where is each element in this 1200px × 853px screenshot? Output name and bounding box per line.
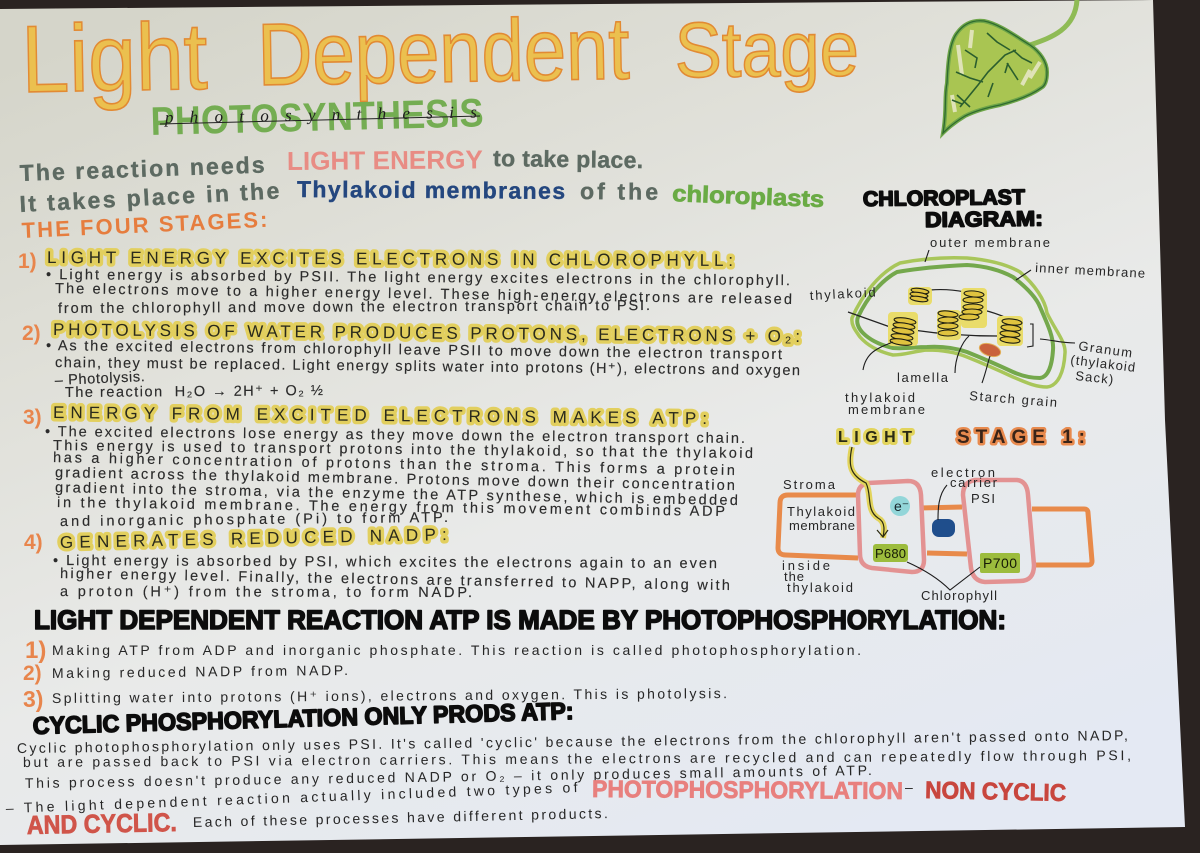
closing statement: – The light dependent reaction actually included two types of <box>6 779 578 816</box>
stage 4 body text: higher energy level. Finally, the electrons are transferred to NAPP, along with <box>60 566 730 594</box>
stage 2 body text: • As the excited electrons from chlorophyll leave PSII to move down the electron transport <box>46 338 782 363</box>
closing statement: PHOTOPHOSPHORYLATION <box>592 776 903 805</box>
list item 3: 3) <box>23 686 43 712</box>
stage 1 labels: membrane <box>789 518 855 533</box>
heading: chloroplast diagram: DIAGRAM: <box>925 208 1043 232</box>
stage 3 <box>23 403 753 530</box>
icon: leaf <box>943 0 1077 133</box>
stage 1 labels: carrier <box>950 475 998 490</box>
stage 1: 1) <box>18 250 37 273</box>
stage 1 labels: electron <box>931 465 995 480</box>
subtitle: Photosynthesis: PHOTOSYNTHESIS <box>150 91 484 144</box>
cyclic paragraph: but are passed back to PSI via electron carriers. This means the electrons are recycled and can repeatedly flow through PSI, <box>23 747 1131 770</box>
stage 3: 3) <box>23 406 42 429</box>
stage 1 labels: PSI <box>971 491 995 506</box>
cyclic paragraph: This process doesn't produce any reduced NADP or O₂ – it only produces small amounts of ATP. <box>25 762 872 791</box>
closing statement <box>6 776 1066 840</box>
stage 4 body text: a proton (H⁺) from the stroma, to form NADP. <box>60 584 472 601</box>
diagram labels: Granum <box>1078 338 1133 360</box>
intro sentence 2: Thylakoid membranes <box>297 176 565 204</box>
title: Light Dependent Stage: Dependent <box>257 0 630 104</box>
diagram labels: Starch grain <box>969 388 1058 410</box>
intro sentence 1: The reaction needs <box>19 151 265 186</box>
stage 1 labels: thylakoid <box>787 580 853 595</box>
arrow: light to P680 <box>850 447 884 538</box>
intro sentence 1: LIGHT ENERGY <box>287 144 483 176</box>
outer membrane <box>852 258 1065 387</box>
intro sentence 1 <box>19 144 643 186</box>
diagram labels: (thylakoid <box>1070 352 1136 375</box>
numbered list <box>23 637 861 712</box>
stage 4 body text: • Light energy is absorbed by PSI, which excites the electrons again to an even <box>53 553 717 572</box>
closing statement: NON CYCLIC <box>925 777 1066 807</box>
pointer lines <box>863 250 1075 383</box>
list item 1: 1) <box>25 637 46 664</box>
P700: P700 <box>983 555 1017 571</box>
lamella lines <box>848 290 1007 336</box>
starch grain <box>978 341 1002 359</box>
title: Light Dependent Stage: Stage <box>674 4 859 94</box>
stage 3: ENERGY FROM EXCITED ELECTRONS MAKES ATP: <box>53 403 707 428</box>
stage 1 body text: The electrons move to a higher energy level. These high-energy electrons are released <box>55 281 792 308</box>
title: Light Dependent Stage <box>21 0 859 113</box>
stage 2 body text <box>46 338 800 401</box>
closing statement: AND CYCLIC. <box>27 807 177 840</box>
diagram labels: outer membrane <box>930 235 1050 250</box>
stage 1 labels: inside <box>782 558 830 573</box>
stage 1 <box>18 248 792 317</box>
photosystem I <box>963 480 1034 582</box>
diagram labels: lamella <box>897 370 949 385</box>
diagram labels: thylakoid <box>845 390 915 405</box>
list item 3: Splitting water into protons (H⁺ ions), electrons and oxygen. This is photolysis. <box>52 685 727 706</box>
stage 2 body text: – Photolysis. <box>54 369 145 389</box>
list item 2: Making reduced NADP from NADP. <box>52 662 348 681</box>
intro sentence 2: chloroplasts <box>672 180 825 212</box>
list item 1 <box>25 637 861 664</box>
stage 2: PHOTOLYSIS OF WATER PRODUCES PROTONS, ELECTRONS + O₂: <box>53 320 800 346</box>
stage 2: 2) <box>22 322 41 345</box>
stage 1 diagram <box>778 427 1092 603</box>
diagram labels <box>809 235 1145 417</box>
heading: cyclic phosphorylation: CYCLIC PHOSPHORYLATION ONLY PRODS ATP: <box>32 698 574 740</box>
intro sentence 2 <box>19 176 825 217</box>
stage 1 labels: the <box>784 569 804 584</box>
electron carrier <box>932 519 955 537</box>
intro sentence 2: of the <box>580 178 658 205</box>
stage 3 body text <box>45 424 753 530</box>
stage 3 body text: • The excited electrons lose energy as they move down the electron transport chain. <box>45 424 745 447</box>
stage 4 <box>24 525 730 601</box>
list item 1: Making ATP from ADP and inorganic phosphate. This reaction is called photophosphorylation. <box>52 642 861 658</box>
P680: P680 <box>875 546 906 561</box>
title: Light Dependent Stage: Light <box>21 4 208 113</box>
stage 3 body text: in the thylakoid membrane. The energy from this movement combinds ADP <box>57 495 725 520</box>
stage 1 labels: Chlorophyll <box>921 588 997 603</box>
stage 3 body text: and inorganic phosphate (Pi) to form ATP. <box>60 510 448 530</box>
heading: stage 1: STAGE 1: <box>957 427 1085 448</box>
electron <box>890 496 910 516</box>
diagram labels: thylakoid <box>809 285 876 303</box>
granum stacks <box>888 287 1023 347</box>
stage 3 body text: gradient across the thylakoid membrane. Protons move down their concentration <box>55 465 735 494</box>
list item 2: 2) <box>23 662 42 685</box>
orange thylakoid membrane <box>778 495 1092 565</box>
intro sentence 1: to take place. <box>493 145 643 173</box>
stage 1 body text <box>46 267 792 317</box>
electron: e⁻ <box>894 498 909 514</box>
heading: light dependent reaction: LIGHT DEPENDENT REACTION ATP IS MADE BY PHOTOPHOSPHORYLATION: <box>34 605 1006 635</box>
stage 1: LIGHT ENERGY EXCITES ELECTRONS IN CHLOROPHYLL: <box>47 248 733 270</box>
stage 3 body text: has a higher concentration of protons than the stroma. This forms a protein <box>53 450 735 479</box>
diagram labels: inner membrane <box>1035 260 1145 281</box>
photosystem II <box>858 481 924 572</box>
P700 <box>980 553 1020 573</box>
inner membrane <box>857 265 1053 378</box>
diagram labels: membrane <box>848 402 925 417</box>
intro sentence 2: It takes place in the <box>19 177 280 217</box>
heading: chloroplast diagram: CHLOROPLAST <box>863 186 1025 211</box>
subtitle: Photosynthesis: photosynthesis <box>164 103 477 127</box>
stage 4: GENERATES REDUCED NADP: <box>60 525 447 552</box>
stage 1 body text: from the chlorophyll and move down the electron transport chain to PSI. <box>58 298 650 317</box>
stage 2 <box>22 320 800 401</box>
chloroplast diagram <box>809 235 1145 417</box>
stage 4: 4) <box>24 531 43 554</box>
cyclic paragraph <box>17 727 1131 791</box>
heading: the four stages: THE FOUR STAGES: <box>21 207 268 243</box>
stage 1 labels: Thylakoid <box>787 504 855 519</box>
closing statement: Each of these processes have different products. <box>193 805 608 830</box>
stage 1 labels: Stroma <box>783 477 836 492</box>
diagram labels: Sack) <box>1075 368 1114 387</box>
stage 2 body text: The reaction H₂O → 2H⁺ + O₂ ½ <box>65 383 323 401</box>
cyclic paragraph: Cyclic photophosphorylation only uses PSI. It's called 'cyclic' because the electrons from the chlorophyll aren't passed onto NADP, <box>17 727 1128 756</box>
stage 4 body text <box>53 553 730 601</box>
pointer lines <box>907 485 980 590</box>
stage 1 body text: • Light energy is absorbed by PSII. The light energy excites electrons in the chlorophyll. <box>46 267 790 289</box>
closing statement: – <box>905 779 913 795</box>
heading: light: LIGHT <box>838 429 912 446</box>
stage 3 body text: This energy is used to transport protons into the thylakoid, so that the thylakoid <box>53 438 753 462</box>
stage 3 body text: gradient into the stroma, via the enzyme the ATP synthese, which is embedded <box>55 480 738 509</box>
stage 1 labels <box>782 465 998 603</box>
heading: chloroplast diagram <box>863 186 1043 232</box>
stage 2 body text: chain, they must be replaced. Light energy splits water into protons (H⁺), electrons and oxygen <box>55 355 800 379</box>
